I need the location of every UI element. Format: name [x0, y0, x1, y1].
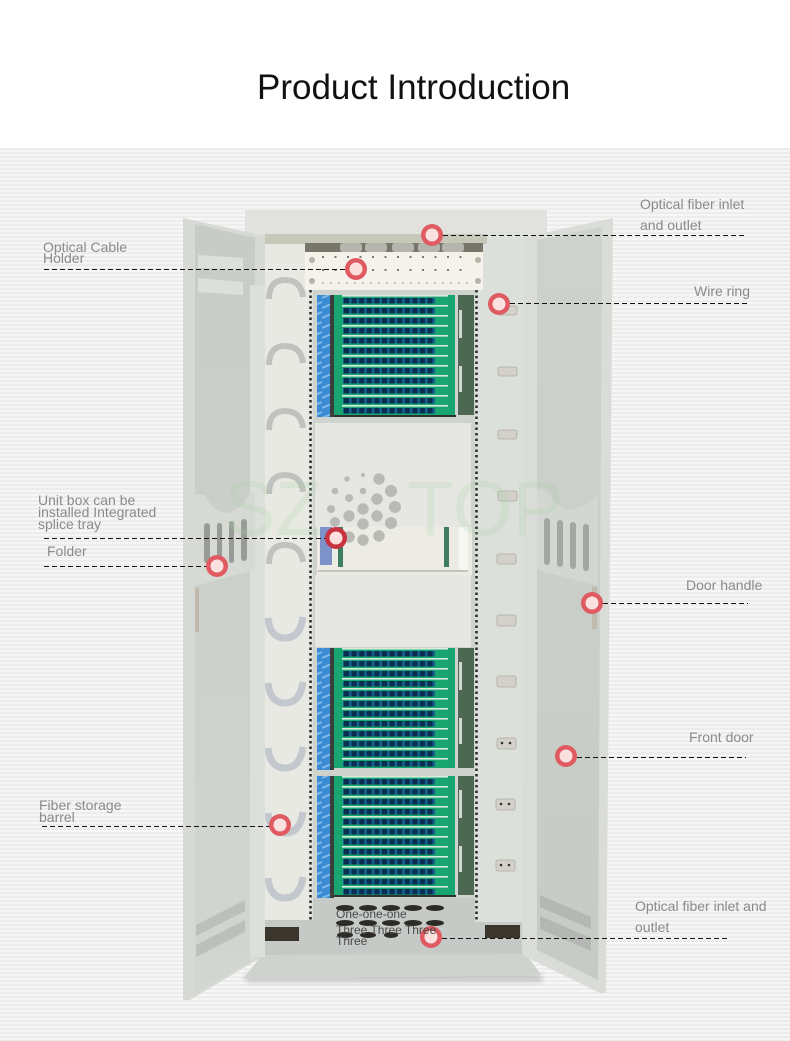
callout: unit box: installed Integrated — [38, 504, 156, 520]
inlet holes — [336, 905, 444, 938]
base shadow — [246, 974, 542, 982]
right door folded plate — [537, 490, 598, 586]
callout: unit box: splice tray — [38, 516, 101, 532]
cabinet base — [243, 954, 541, 979]
left door — [183, 218, 265, 1000]
fiber panel 1 — [317, 295, 474, 417]
callout: unit box: Unit box can be — [38, 492, 135, 508]
watermark: TOP — [407, 466, 564, 552]
wire rings — [496, 306, 517, 871]
rail dots right — [475, 290, 478, 920]
top bar — [265, 234, 487, 244]
callout: optical cable holder: Holder — [43, 250, 85, 266]
callout: folder: Folder — [47, 543, 87, 559]
right door handle — [592, 587, 597, 629]
right ring column — [477, 240, 527, 922]
callout: folder — [44, 543, 228, 577]
inner bay — [313, 290, 475, 906]
watermark — [224, 466, 564, 552]
overlapping floor label: Three Three Three — [336, 923, 437, 937]
overlapping floor label — [336, 907, 437, 948]
callout: unit box — [38, 492, 347, 549]
callout: door handle — [581, 577, 762, 614]
blank panel upper — [315, 423, 471, 527]
fiber panel 2 — [317, 648, 474, 770]
callout: optical cable holder: Optical Cable — [43, 239, 127, 255]
callout: optical fiber inlet bottom: Optical fiber inlet and — [635, 898, 767, 914]
fiber storage barrels — [268, 280, 303, 898]
left door handle — [195, 588, 199, 632]
callout: wire ring — [488, 283, 750, 315]
floor slots — [265, 925, 520, 941]
callout: optical fiber inlet bottom — [420, 898, 767, 948]
left door folded plate — [195, 493, 255, 586]
cabinet top panel — [245, 210, 547, 240]
callout: front door — [555, 729, 754, 767]
callout: optical fiber inlet top: Optical fiber inlet — [640, 196, 744, 212]
title: Product Introduction — [257, 68, 570, 107]
left fiber column — [265, 240, 311, 920]
cabinet body — [263, 234, 527, 958]
optical cable holder plate — [305, 243, 483, 290]
overlapping floor label: Three — [336, 934, 368, 948]
callout: optical fiber inlet bottom: outlet — [635, 919, 669, 935]
callout: fiber storage barrel — [39, 797, 291, 836]
right door — [522, 218, 613, 993]
integrated splice tray unit — [317, 527, 472, 575]
callout: optical cable holder — [43, 239, 367, 280]
overlapping floor label: One-one-one — [336, 907, 407, 921]
callout: optical fiber inlet top — [421, 196, 745, 246]
callout: fiber storage barrel: barrel — [39, 809, 75, 825]
callout: optical fiber inlet top: and outlet — [640, 217, 702, 233]
callout: fiber storage barrel: Fiber storage — [39, 797, 122, 813]
cabinet floor — [263, 898, 527, 958]
watermark: SZ — [224, 466, 322, 552]
blank panel lower — [315, 575, 471, 647]
callout: front door: Front door — [689, 729, 754, 745]
cabinet — [183, 210, 613, 1000]
callout: wire ring: Wire ring — [694, 283, 750, 299]
rail dots left — [309, 290, 312, 920]
right door vents — [540, 895, 591, 929]
fiber panel 3 — [317, 776, 474, 898]
callout: door handle: Door handle — [686, 577, 762, 593]
left door vents — [196, 900, 245, 936]
